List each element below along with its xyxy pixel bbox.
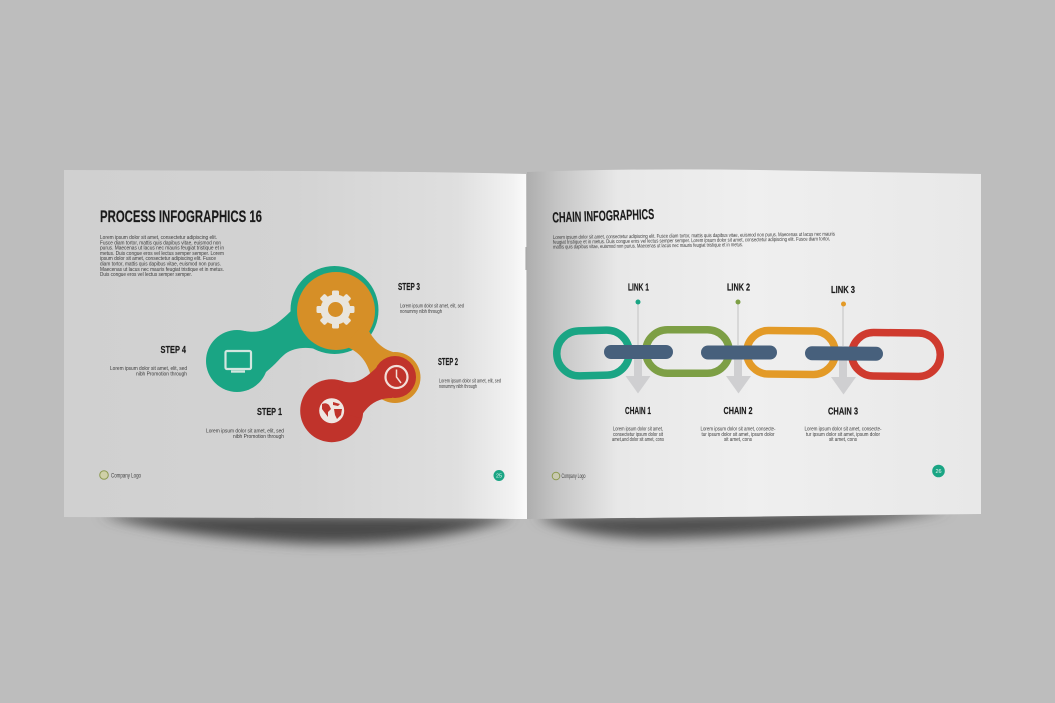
right page <box>527 169 981 519</box>
connector bars <box>604 345 883 361</box>
step 1 label <box>206 407 284 440</box>
left page body text: Lorem ipsum dolor sit amet, consectetur adipiscing elit. <box>100 235 217 241</box>
step 3 label: nonummy nibh through <box>400 309 442 315</box>
orange shape: step 3 and step 2 <box>297 272 420 403</box>
binding detail <box>525 247 527 270</box>
right page title: CHAIN INFOGRAPHICS <box>552 207 655 226</box>
chain 2 text: tur ipsum dolor sit amet, ipsum dolor <box>702 432 775 438</box>
step 4 label: nibh Promotion through <box>136 372 187 378</box>
step 2 label: nonummy nibh through <box>439 384 477 390</box>
chain 3 text: sit amet, cons <box>829 437 857 443</box>
step 4 label <box>110 345 187 378</box>
icon: globe <box>319 398 344 423</box>
chain 1 text: amet,and dolor sit amet, cons <box>612 437 664 443</box>
right page body text: mattis quis dapibus vitae, euismod non purus. Maecenas ut lacus nec mauris feugiat tristique et in metus. <box>553 242 743 251</box>
page shadow: left <box>100 514 515 544</box>
page shadow: right <box>535 510 950 539</box>
step 3 label: STEP 3 <box>398 282 420 293</box>
right footer logo <box>552 472 586 480</box>
step 4 label: STEP 4 <box>160 345 186 356</box>
chain 2 text: sit amet, cons <box>724 437 752 443</box>
left footer logo: Company Logo <box>111 474 141 480</box>
left footer logo <box>100 471 141 480</box>
right page number <box>932 465 945 477</box>
link labels: LINK 3 <box>831 285 855 296</box>
arrows with pins <box>626 300 856 394</box>
chain 3 text: CHAIN 3 <box>828 406 858 418</box>
step 3 label <box>398 282 464 315</box>
chain 2 text: CHAIN 2 <box>724 406 753 417</box>
right footer logo: Company Logo <box>562 474 586 480</box>
right page body text <box>553 232 835 251</box>
step 2 label: Lorem ipsum dolor sit amet, elit, sed <box>439 378 501 384</box>
step 1 label: Lorem ipsum dolor sit amet, elit, sed <box>206 428 284 434</box>
chain 2 text <box>700 406 776 443</box>
process diagram <box>206 266 420 442</box>
link: orange <box>747 330 835 375</box>
link labels: LINK 1 <box>628 282 649 294</box>
step 4 label: Lorem ipsum dolor sit amet, elit, sed <box>110 366 187 372</box>
left page body text: metus. Duis congue eros vel lectus semper semper. Lorem <box>100 251 224 257</box>
chain 2 text: Lorem ipsum dolor sit amet, consecte- <box>700 426 776 432</box>
link: red <box>852 332 940 377</box>
link labels <box>628 282 855 296</box>
step 3 label: Lorem ipsum dolor sit amet, elit, sed <box>400 304 464 310</box>
link: teal <box>556 330 630 376</box>
chain 3 text <box>804 406 882 443</box>
left page body text <box>100 235 224 278</box>
step 2 label: STEP 2 <box>438 357 458 368</box>
link: green <box>646 330 729 373</box>
left page <box>64 170 527 519</box>
chain 1 text: CHAIN 1 <box>625 406 651 417</box>
left page number <box>494 470 504 481</box>
left page body text: ipsum dolor sit amet, consectetur adipiscing elit. Fusce <box>100 256 216 262</box>
right page body text: Lorem ipsum dolor sit amet, consectetur adipiscing elit. Fusce diam tortor, mattis quis dapibus vitae, euismod non purus. Maecenas ut lacus nec mauris <box>553 232 835 241</box>
chain 1 text <box>612 406 664 443</box>
red shape: step 2 and step 1 <box>300 356 416 442</box>
step 2 label <box>438 357 501 390</box>
left page body text: Duis congue eros vel lectus semper semper. <box>100 272 192 278</box>
chain 3 text: Lorem ipsum dolor sit amet, consecte- <box>804 426 882 432</box>
chain links <box>556 330 940 377</box>
left page number: 25 <box>496 474 502 480</box>
icon: monitor <box>226 351 251 372</box>
chain 3 text: tur ipsum dolor sit amet, ipsum dolor <box>806 432 880 438</box>
left page body text: Fusce diam tortor, mattis quis dapibus vitae, euismod non <box>100 240 221 246</box>
icon: gear <box>316 290 354 328</box>
left page body text: Maecenas ut lacus nec mauris feugiat tristique et in metus. <box>100 267 224 273</box>
step 1 label: nibh Promotion through <box>233 434 284 440</box>
left page body text: purus. Maecenas ut lacus nec mauris feugiat tristique et in <box>100 246 224 252</box>
teal shape: step 4 and step 3 backing <box>206 266 378 392</box>
right page body text: feugiat tristique et in metus. Duis congue eros vel lectus semper semper. Lorem ipsum dolor sit amet, consectetur adipiscing elit. Fusce diam tortor, <box>553 236 830 246</box>
step 1 label: STEP 1 <box>257 407 282 418</box>
icon: clock <box>386 366 408 388</box>
chain 1 text: consectetur ipsum dolor sit <box>613 432 663 438</box>
link labels: LINK 2 <box>727 282 750 294</box>
left page body text: diam tortor, mattis quis dapibus vitae, euismod non purus. <box>100 262 221 268</box>
chain 1 text: Lorem ipsum dolor sit amet, <box>613 426 663 432</box>
right page number: 26 <box>935 469 942 475</box>
left page title: PROCESS INFOGRAPHICS 16 <box>100 208 262 226</box>
